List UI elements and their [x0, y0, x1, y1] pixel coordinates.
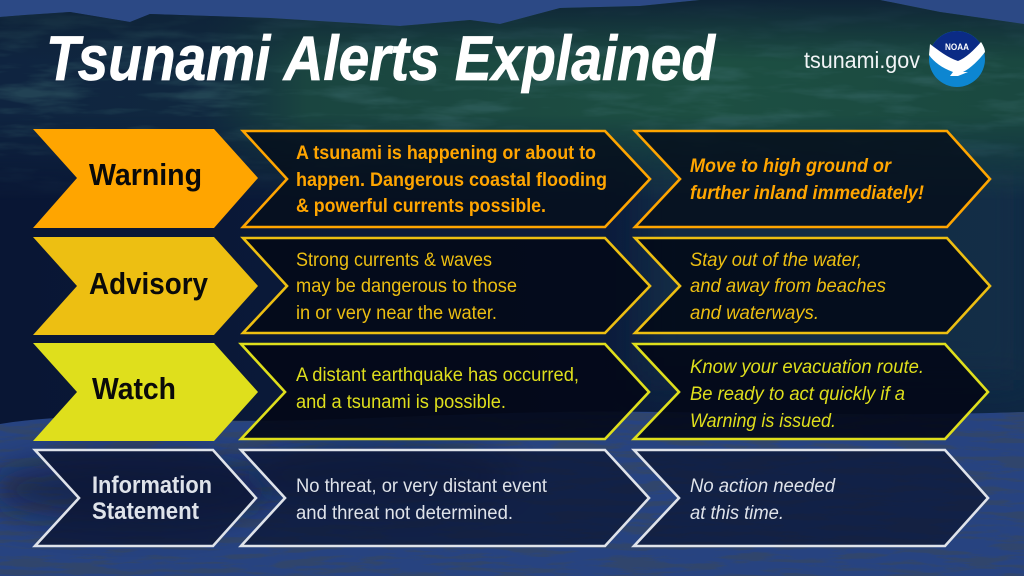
label chevron: Information Statement — [35, 450, 256, 546]
label chevron: Warning: Warning — [89, 157, 202, 192]
icon: NOAA logo — [929, 31, 985, 87]
panel: Warning meaning: happen. Dangerous coastal flooding — [296, 170, 607, 191]
row: Advisory — [33, 237, 990, 335]
panel: Watch meaning — [241, 344, 649, 439]
website link: tsunami.gov — [804, 47, 920, 73]
row: Watch — [33, 343, 988, 441]
panel: Advisory action — [635, 238, 990, 333]
panel: Watch action: Know your evacuation route. — [690, 357, 924, 378]
panel: Warning meaning: & powerful currents possible. — [296, 196, 546, 217]
panel: Information action: No action needed — [690, 476, 836, 497]
panel: Watch meaning: and a tsunami is possible. — [296, 392, 506, 413]
panel: Watch action: Be ready to act quickly if a — [690, 384, 905, 405]
label chevron: Information Statement: Information — [92, 472, 212, 499]
panel: Advisory meaning: may be dangerous to those — [296, 276, 517, 297]
label chevron: Advisory: Advisory — [89, 266, 209, 301]
label chevron: Warning — [33, 129, 258, 228]
panel: Advisory action: Stay out of the water, — [690, 250, 862, 271]
label chevron: Information Statement: Statement — [92, 498, 199, 525]
label chevron: Watch: Watch — [92, 371, 176, 406]
panel: Watch action — [634, 344, 988, 439]
row: Information Statement — [35, 450, 988, 546]
panel: Warning action: Move to high ground or — [690, 156, 893, 177]
panel: Advisory meaning — [243, 238, 650, 333]
panel: Advisory action: and away from beaches — [690, 276, 886, 297]
panel: Warning action: further inland immediately! — [690, 183, 924, 204]
panel: Information action — [634, 450, 988, 546]
panel: Information meaning: No threat, or very distant event — [296, 476, 548, 497]
icon: NOAA logo: NOAA — [945, 42, 969, 53]
panel: Warning meaning — [243, 131, 650, 227]
panel: Advisory meaning: Strong currents & waves — [296, 250, 492, 271]
panel: Information action: at this time. — [690, 503, 784, 524]
panel: Advisory meaning: in or very near the water. — [296, 303, 497, 324]
panel: Information meaning: and threat not determined. — [296, 503, 513, 524]
panel: Information meaning — [241, 450, 649, 546]
panel: Advisory action: and waterways. — [690, 303, 819, 324]
panel: Warning meaning: A tsunami is happening or about to — [296, 143, 596, 164]
panel: Watch meaning: A distant earthquake has occurred, — [296, 365, 579, 386]
title: Tsunami Alerts Explained — [46, 24, 716, 94]
row: Warning — [33, 129, 990, 228]
panel: Warning action — [635, 131, 990, 227]
label chevron: Watch — [33, 343, 258, 441]
label chevron: Advisory — [33, 237, 258, 335]
panel: Watch action: Warning is issued. — [690, 411, 836, 432]
